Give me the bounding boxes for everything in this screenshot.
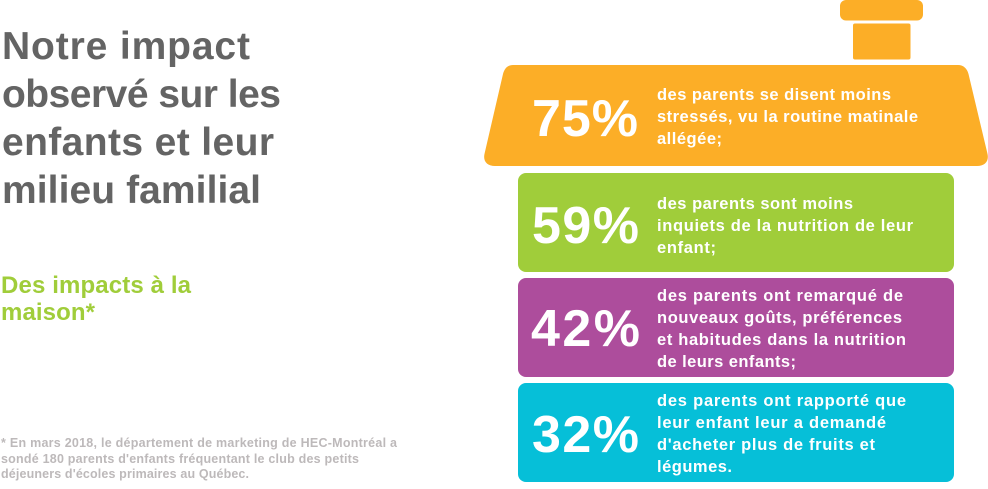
title: enfants et leur bbox=[2, 121, 274, 164]
text: 59% description: enfant; bbox=[657, 239, 716, 257]
panel: 42% bbox=[518, 278, 954, 377]
footnote: sondé 180 parents d'enfants fréquentant le club des petits bbox=[1, 452, 359, 466]
title bbox=[2, 25, 281, 212]
text: 32% description bbox=[657, 392, 906, 476]
stat: 75%: 75% bbox=[532, 90, 638, 148]
text: 59% description: inquiets de la nutrition de leur bbox=[657, 217, 914, 235]
text: 42% description: des parents ont remarqué de bbox=[657, 287, 903, 305]
subtitle: Des impacts à la bbox=[1, 272, 192, 299]
text: 32% description: légumes. bbox=[657, 458, 732, 476]
title: Notre impact bbox=[2, 25, 250, 68]
text: 42% description: et habitudes dans la nutrition bbox=[657, 331, 906, 349]
subtitle bbox=[1, 272, 192, 326]
icon: chimney cap bbox=[840, 0, 923, 20]
panel: roof 75% bbox=[484, 65, 988, 166]
stat: 59%: 59% bbox=[532, 197, 639, 255]
text: 42% description: de leurs enfants; bbox=[657, 353, 796, 371]
text: 42% description bbox=[657, 287, 906, 371]
panel: 59% bbox=[518, 173, 954, 272]
text: 42% description: nouveaux goûts, préférences bbox=[657, 309, 902, 327]
subtitle: maison* bbox=[1, 299, 96, 326]
footnote: déjeuners d'écoles primaires au Québec. bbox=[1, 467, 249, 481]
footnote: * En mars 2018, le département de marketing de HEC-Montréal a bbox=[1, 436, 398, 450]
title: milieu familial bbox=[2, 169, 261, 212]
panel: 32% bbox=[518, 383, 954, 482]
title: observé sur les bbox=[2, 73, 281, 116]
text: 32% description: d'acheter plus de fruits et bbox=[657, 436, 876, 454]
text: 75% description bbox=[657, 86, 918, 148]
stat: 42%: 42% bbox=[531, 300, 640, 358]
stat: 32%: 32% bbox=[532, 406, 639, 464]
text: 59% description bbox=[657, 195, 914, 257]
footnote bbox=[1, 436, 398, 481]
icon: chimney bbox=[853, 24, 910, 60]
text: 59% description: des parents sont moins bbox=[657, 195, 853, 213]
text: 32% description: des parents ont rapporté que bbox=[657, 392, 906, 410]
text: 75% description: stressés, vu la routine matinale bbox=[657, 108, 918, 126]
text: 32% description: leur enfant leur a demandé bbox=[657, 414, 886, 432]
text: 75% description: allégée; bbox=[657, 130, 722, 148]
text: 75% description: des parents se disent moins bbox=[657, 86, 891, 104]
